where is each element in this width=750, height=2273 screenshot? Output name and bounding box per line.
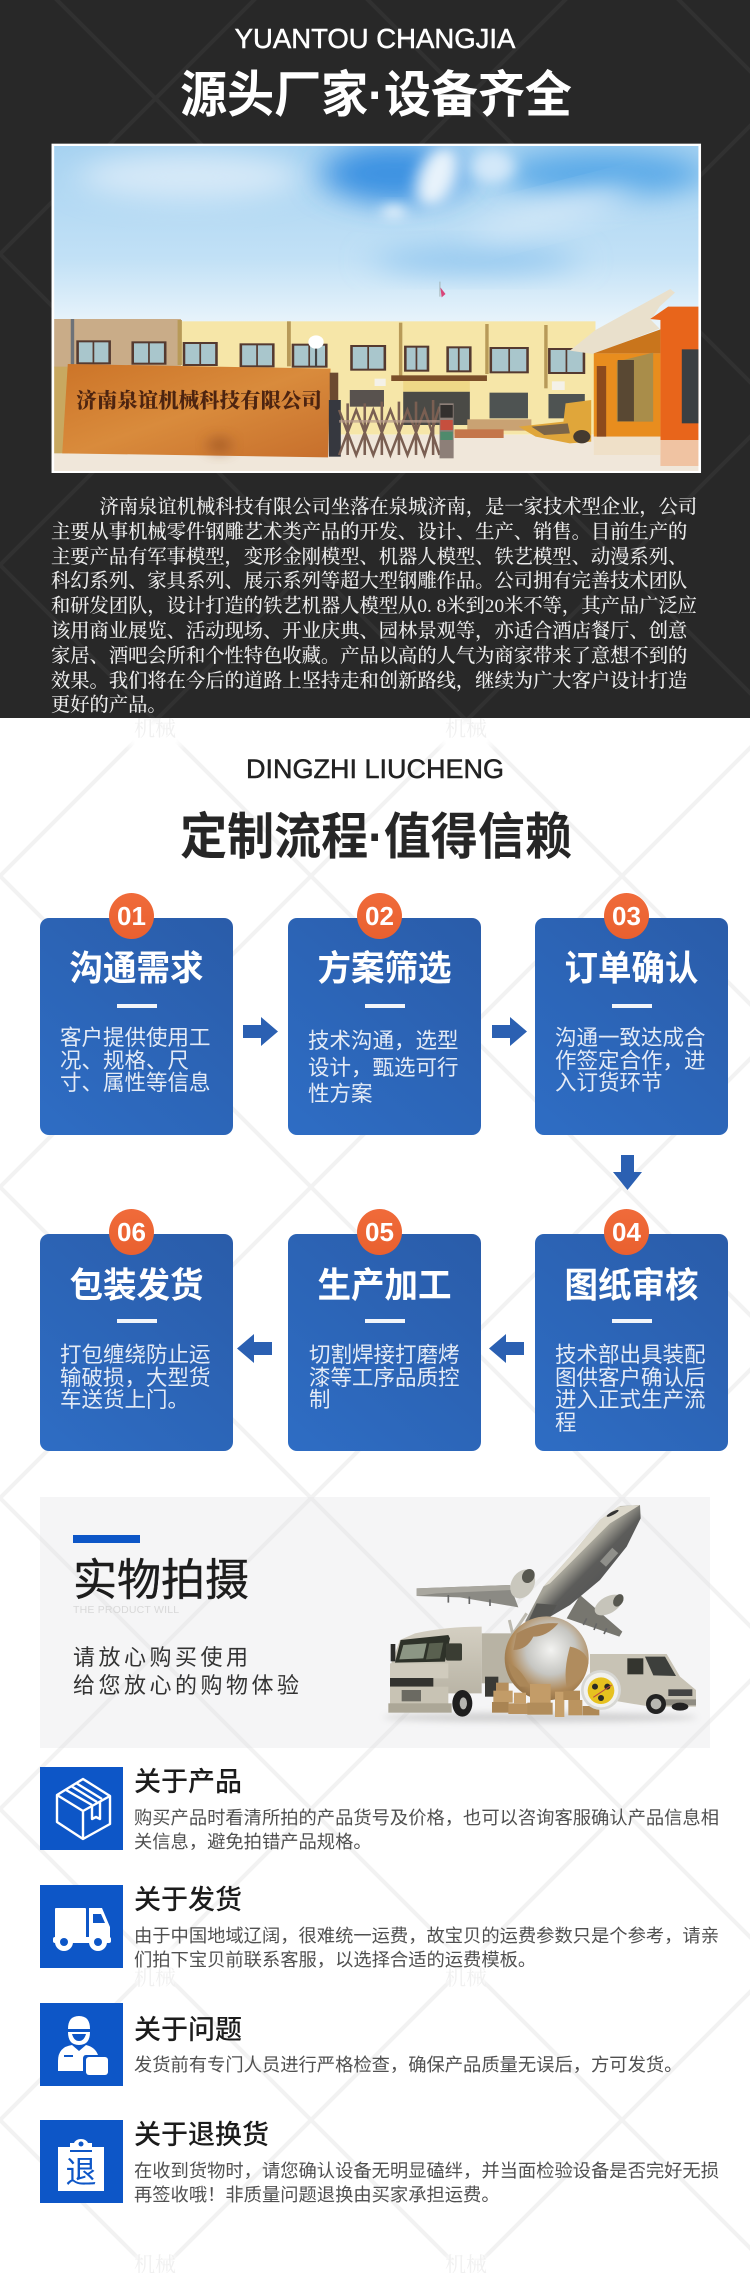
heading: 源头厂家·设备齐全: 源头厂家·设备齐全 [180, 66, 572, 123]
text block: company introduction: 济南泉谊机械科技有限公司坐落在泉城济南，是一家技术型企业，公司 [100, 497, 697, 518]
arrow 3 to 4 [613, 1155, 642, 1190]
step card 04 [535, 1234, 728, 1451]
globe [505, 1616, 589, 1700]
text block: company introduction: 效果。我们将在今后的道路上坚持走和创新路线，继续为广大客户设计打造 [51, 671, 687, 692]
text block: reassurance: 请放心购买使用 [73, 1645, 252, 1670]
step card 03: 订单确认 [564, 950, 698, 989]
title: 关于问题: 关于问题 [134, 2015, 242, 2045]
step card 05: 生产加工 [318, 1267, 452, 1306]
step card 03 [535, 918, 728, 1135]
text: 关于产品 description: 购买产品时看清所拍的产品货号及价格，也可以咨询客服确认产品信息相 [134, 1807, 719, 1828]
text block: company introduction: 主要从事机械零件钢雕艺术类产品的开发、设计、生产、销售。目前生产的 [51, 522, 687, 543]
step card 01: 客户提供使用工 [60, 1026, 211, 1050]
subtitle: YUANTOU CHANGJIA: YUANTOU CHANGJIA [235, 23, 515, 54]
badge 03 [604, 893, 649, 939]
step card 02: 方案筛选 [318, 950, 452, 989]
icon: return clipboard [40, 2120, 123, 2203]
text: 关于发货 description: 们拍下宝贝前联系客服，以选择合适的运费模板。 [134, 1949, 536, 1970]
panel: dark company section background [0, 0, 750, 718]
heading: 定制流程·值得信赖: 定制流程·值得信赖 [180, 808, 572, 865]
step card 02 [288, 918, 481, 1135]
arrow 2 to 3 [492, 1017, 527, 1046]
step card 06: 包装发货 [70, 1267, 204, 1306]
title: 关于发货: 关于发货 [134, 1885, 242, 1915]
text: 关于发货 description: 由于中国地域辽阔，很难统一运费，故宝贝的运费参数只是个参考，请亲 [134, 1925, 719, 1946]
icon: delivery truck [40, 1885, 123, 1968]
stone wall: 济南泉谊机械科技有限公司 [76, 388, 322, 413]
title: 关于产品: 关于产品 [134, 1767, 242, 1797]
arrow 5 to 6 [237, 1334, 272, 1363]
arrow 1 to 2 [243, 1017, 278, 1046]
badge 05 [357, 1209, 402, 1255]
text block: company introduction: 科幻系列、家具系列、展示系列等超大型钢雕作品。公司拥有完善技术团队 [51, 571, 687, 592]
badge 05: 05 [365, 1217, 394, 1247]
ground [54, 435, 698, 471]
text: 关于发货 description [134, 1925, 719, 1970]
heading: 实物拍摄: 实物拍摄 [73, 1556, 249, 1605]
cardboard boxes [492, 1683, 599, 1717]
caption: THE PRODUCT WILL: THE PRODUCT WILL [73, 1604, 179, 1616]
text: 关于产品 description: 关信息，避免拍错产品规格。 [134, 1831, 372, 1852]
text: 机械 [134, 1966, 176, 1990]
accent bar [73, 1535, 140, 1543]
step card 02: 设计，甄选可行 [308, 1056, 459, 1080]
step card 04: 技术部出具装配 [555, 1343, 706, 1367]
subtitle: DINGZHI LIUCHENG: DINGZHI LIUCHENG [246, 754, 504, 784]
step card 04: 图供客户确认后 [555, 1366, 706, 1390]
wheel loader [519, 400, 591, 443]
step card 04: 程 [555, 1410, 577, 1434]
text block: reassurance: 给您放心的购物体验 [73, 1672, 303, 1698]
stone wall [54, 364, 338, 457]
title: 关于退换货: 关于退换货 [134, 2120, 269, 2150]
airplane [417, 1505, 641, 1637]
step card 06: 输破损，大型货 [60, 1366, 211, 1390]
truck [388, 1627, 515, 1717]
text block: reassurance [73, 1645, 303, 1698]
icon: package box [40, 1767, 123, 1850]
step card 06: 车送货上门。 [60, 1388, 189, 1412]
text: 关于问题 description: 发货前有专门人员进行严格检查，确保产品质量无误后，方可发货。 [134, 2054, 682, 2075]
step card 06: 打包缠绕防止运 [60, 1343, 211, 1367]
text: 关于退换货 description: 在收到货物时，请您确认设备无明显磕绊，并当面检验设备是否完好无损 [134, 2160, 719, 2181]
text block: company introduction: 和研发团队，设计打造的铁艺机器人模型从0.8米到20米不等，其产品广泛应 [51, 596, 697, 617]
step card 04: 图纸审核 [564, 1267, 698, 1306]
building [54, 319, 595, 435]
badge 03: 03 [612, 901, 641, 931]
clock dial [581, 1670, 621, 1710]
text: 机械 [445, 1966, 487, 1990]
step card 03: 沟通一致达成合 [555, 1026, 706, 1050]
text: 机械 [445, 717, 487, 741]
step card 01: 寸、属性等信息 [60, 1071, 211, 1095]
text block: company introduction: 主要产品有军事模型，变形金刚模型、机器人模型、铁艺模型、动漫系列、 [51, 547, 687, 568]
step card 04: 进入正式生产流 [555, 1388, 706, 1412]
badge 02: 02 [365, 901, 394, 931]
step card 01 [40, 918, 233, 1135]
step card 05: 漆等工序品质控 [309, 1366, 460, 1390]
text block: company introduction: 更好的产品。 [51, 695, 167, 716]
badge 06 [109, 1209, 154, 1255]
photo: factory gate and building [52, 144, 702, 473]
badge 04: 04 [612, 1217, 641, 1247]
badge 04 [604, 1209, 649, 1255]
step card 06 [40, 1234, 233, 1451]
step card 03: 入订货环节 [555, 1071, 663, 1095]
icon: return clipboard: 退 [66, 2155, 96, 2190]
badge 01 [109, 893, 154, 939]
step card 05: 切割焊接打磨烤 [309, 1343, 460, 1367]
panel: photo shooting background [40, 1497, 710, 1748]
text block: company introduction: 该用商业展览、活动现场、开业庆典、园林景观等，亦适合酒店餐厅、创意 [51, 621, 687, 642]
text: 关于产品 description [134, 1807, 719, 1852]
step card 03: 作签定合作，进 [555, 1048, 706, 1072]
illustration: plane, truck, globe, van [387, 1505, 696, 1724]
text block: company introduction [51, 496, 697, 716]
text: 关于退换货 description [134, 2160, 719, 2205]
text: 关于退换货 description: 再签收哦！非质量问题退换由买家承担运费。 [134, 2184, 500, 2205]
orange pavilion [570, 289, 698, 466]
icon: courier with parcel [40, 2003, 123, 2086]
badge 06: 06 [117, 1217, 146, 1247]
flag [440, 282, 446, 297]
step card 05 [288, 1234, 481, 1451]
text block: company introduction: 家居、酒吧会所和个性特色收藏。产品以高的人气为商家带来了意想不到的 [51, 646, 687, 667]
step card 02: 性方案 [308, 1082, 373, 1106]
arrow 4 to 5 [489, 1334, 524, 1363]
van [590, 1654, 696, 1714]
text: 机械 [134, 717, 176, 741]
step card 01: 况、规格、尺 [60, 1048, 189, 1072]
sliding gate [329, 400, 454, 458]
badge 02 [357, 893, 402, 939]
step card 02: 技术沟通，选型 [308, 1029, 459, 1053]
badge 01: 01 [117, 901, 146, 931]
step card 01: 沟通需求 [70, 950, 204, 989]
step card 05: 制 [309, 1388, 331, 1412]
